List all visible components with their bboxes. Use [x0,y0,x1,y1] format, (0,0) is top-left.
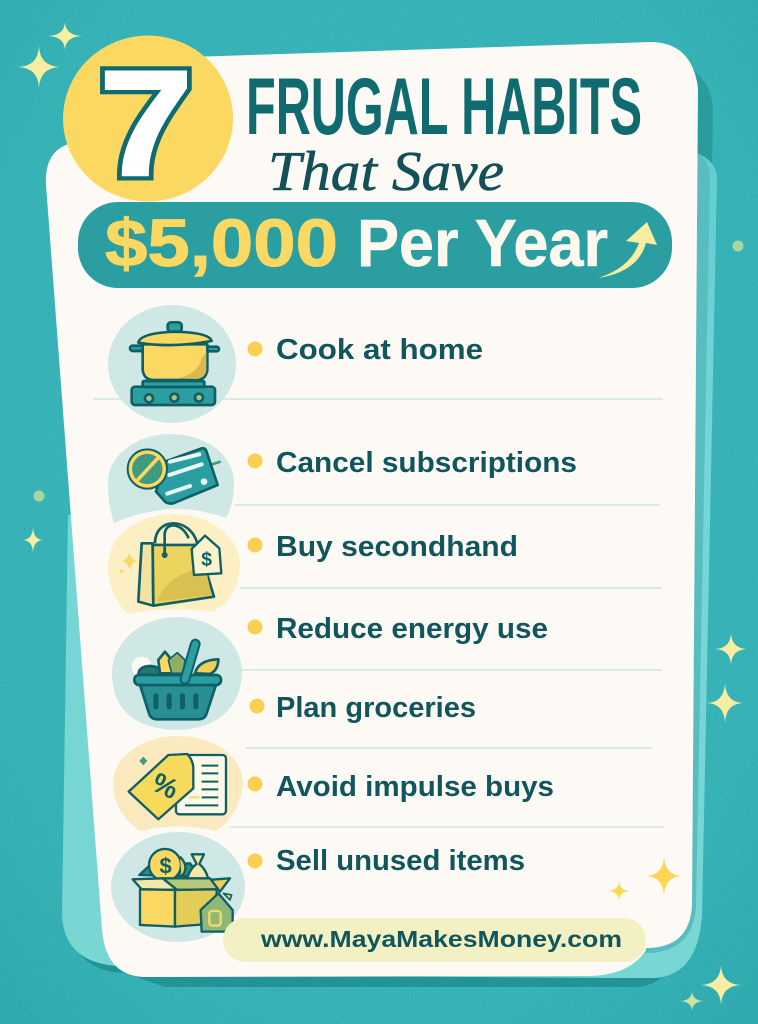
list item: avoid impulse buys: Avoid impulse buys [276,771,554,803]
coin dollar sign: $ [160,853,172,878]
icon: rising arrow [598,222,657,278]
banner: $5,000 per year [78,202,672,288]
list item: plan groceries: Plan groceries [276,692,476,724]
subtitle: That Save: That Save [268,141,504,203]
dollar sign on tag: $ [201,550,212,571]
percent sign on tag: % [147,766,183,805]
icon: box of unused items with coin and tag [111,832,245,942]
list item: reduce energy use: Reduce energy use [276,613,548,645]
website pill [223,918,646,962]
list item: cook at home: Cook at home [276,334,483,366]
icon: yellow circle with number 7 [63,36,233,207]
list item: cancel subscriptions: Cancel subscriptions [276,447,577,479]
panel: main card [46,42,698,977]
list item: buy secondhand: Buy secondhand [276,531,518,563]
number 7: 7 [99,39,193,207]
per year: Per Year [357,206,608,281]
panel: stacked paper layers behind card [62,60,717,987]
amount: $5,000 [105,206,338,281]
icon: cooking pot on stove [108,305,236,423]
icon: shopping bag with price tag [108,514,240,614]
icon: discount tag and receipt [113,736,243,831]
list item: sell unused items: Sell unused items [276,845,525,877]
website pill: www.MayaMakesMoney.com [260,926,622,952]
icon: grocery basket [112,617,242,730]
icon: cancelled credit card [108,434,234,523]
number 7: 7 [99,39,193,207]
divider lines [93,399,664,827]
